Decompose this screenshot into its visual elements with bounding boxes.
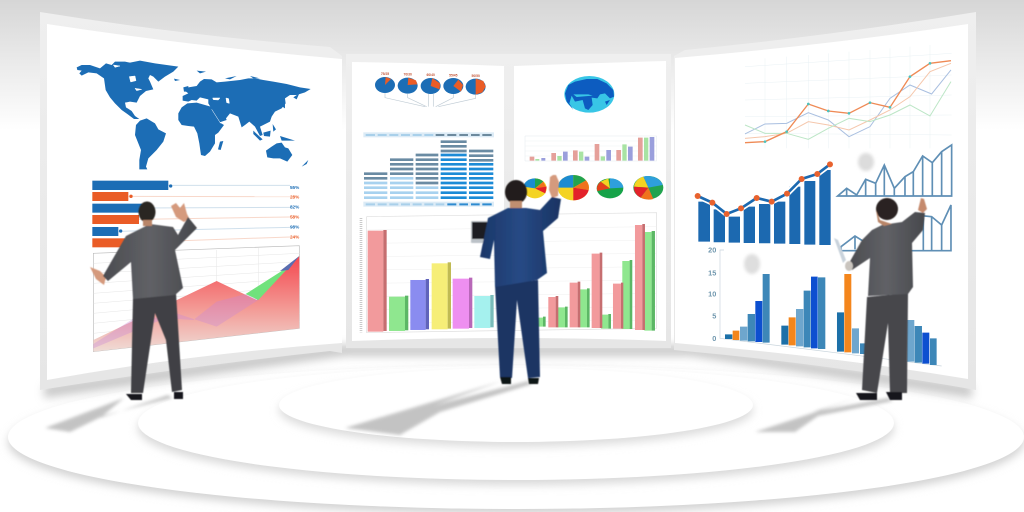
centre figure shadow [345,381,532,435]
percent labels [290,185,300,240]
head [876,198,898,226]
bottom strip [363,202,494,207]
percent labels: 24% [290,235,300,240]
medium blue bars [748,274,937,365]
axis labels: 0 [712,334,716,343]
area chart [93,246,299,352]
bar 5 [92,227,118,236]
panel: left screen with map [40,12,342,390]
eurasia [183,78,311,136]
panel: right screen [674,12,976,390]
bar 2 [92,192,128,201]
red bars [530,138,643,161]
bar 1 [92,181,168,190]
shoes [856,392,902,400]
pale blue series [745,70,951,137]
pie labels: 60/40 [426,73,435,77]
globe [564,76,614,113]
top strip [363,132,494,137]
ghost smudge lower [744,254,760,274]
head [505,180,527,208]
mountain chart upper [838,145,952,196]
right figure shadow [755,398,893,432]
left hand [90,267,106,285]
ghost smudge upper [858,153,874,171]
bar 3 [92,204,142,213]
bar green [389,296,408,331]
line chart [745,45,952,148]
green bars [535,138,648,161]
left figure shadow [45,395,172,432]
percent labels: 82% [290,205,300,210]
bar 4 [92,215,139,224]
column 1 [364,183,387,198]
shoes [126,392,183,400]
pie 2 [558,175,589,200]
figure shadows [45,381,893,435]
trousers [495,280,540,378]
world map [77,61,311,169]
mountain chart lower [841,205,951,251]
dark blue bars [725,312,844,352]
jacket [848,212,925,296]
panel: centre right screen [509,54,671,348]
bar 6 [92,238,125,247]
purple bars [541,137,654,161]
progress bars with percentages [92,181,300,247]
percent labels: 55% [290,185,300,190]
pie 4 [633,176,663,200]
raised hand [918,198,927,213]
light blue bars [740,309,914,362]
purple series [93,294,258,348]
four coloured pie charts [523,175,663,200]
axis labels: 10 [708,290,716,299]
strong blue bars [755,277,929,364]
head [138,202,156,226]
percent labels: 98% [290,225,300,230]
south america [135,118,166,169]
raised hand [171,203,189,222]
jacket [480,197,561,287]
islands [174,71,308,167]
red series [93,256,299,352]
pie row: centre left [375,72,486,107]
trousers [862,293,908,393]
north america [77,61,178,119]
lower right bar chart [708,246,942,366]
axis labels: 20 [708,246,716,255]
floor platform: stacked discs [8,365,1024,512]
ceiling background [0,0,1024,130]
jacket [103,217,197,299]
teal markers [764,62,931,143]
bar cyan [474,295,494,328]
pie labels: 55/45 [449,73,458,77]
person: left analyst [90,202,197,400]
axis labels: 5 [712,312,716,321]
pie labels: 70/30 [403,73,412,77]
column 3 [416,188,438,198]
column 2 [390,178,413,198]
raised hand [549,175,559,198]
trend line [698,164,830,214]
stacked segment bar chart [363,132,494,207]
pie labels: 50/50 [471,74,480,78]
inland water [113,65,229,123]
pale orange series [745,63,951,138]
bar purple [410,279,429,330]
left hand [845,261,853,271]
pie 1 [523,178,547,198]
blue bar chart with trend line [695,161,833,245]
laptop [471,221,489,243]
paired red and green bars [538,224,655,331]
marker dots [119,184,172,233]
panel: centre left screen [346,54,509,348]
large 3D bar chart [361,213,657,333]
axis labels [708,246,716,343]
bar red [368,230,387,332]
person: centre analyst with laptop [471,175,561,384]
pie labels [381,72,480,78]
percent labels: 28% [290,194,300,199]
column 5 [469,164,493,198]
axis labels: 15 [708,268,716,277]
green series [246,256,299,300]
tablet [834,238,846,263]
orange bars [733,274,851,352]
column 4 [441,155,467,198]
trousers [131,293,182,393]
panel shadows [44,345,972,398]
pie 3 [597,178,623,198]
bar pink [453,278,472,329]
percent labels: 58% [290,214,300,219]
orange markers [695,161,833,217]
pie labels: 75/25 [381,72,389,76]
shoes [500,377,539,384]
small grouped bar chart [525,136,657,161]
africa [178,103,224,156]
pale green series [745,82,951,139]
person: right analyst with tablet [834,198,927,400]
connector lines [385,93,476,107]
orange series [745,61,951,143]
australia [266,143,292,162]
bar yellow [432,262,451,329]
